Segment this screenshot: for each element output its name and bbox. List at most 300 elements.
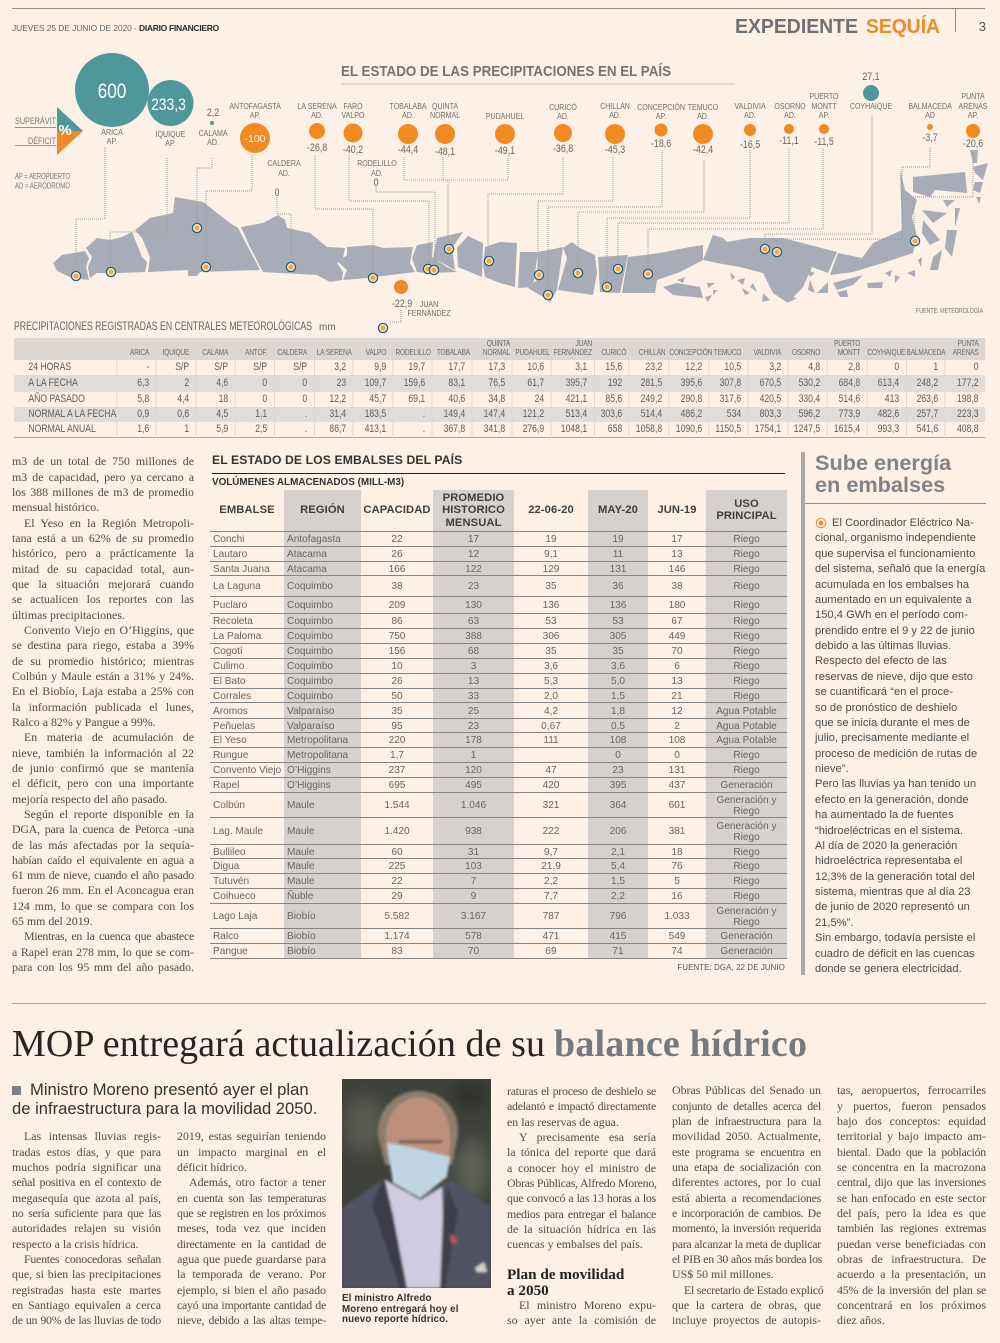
table: precipitaciones por estación: 34,8 [488, 393, 505, 405]
main headline: balance hídrico [554, 1023, 807, 1065]
table: embalses: 108 [610, 735, 626, 746]
table: precipitaciones por estación: 177,2 [957, 377, 979, 389]
table: embalses: 2 [674, 720, 680, 732]
table: embalses: Maule [287, 826, 314, 837]
article: column 1: registradas hasta este martes [12, 1283, 161, 1297]
station names: AP. [968, 110, 978, 120]
table: embalses: 36 [612, 581, 624, 592]
table: embalses: Agua Potable [716, 706, 777, 716]
station names: ARENAS [959, 101, 987, 111]
table: precipitaciones por estación: RODELILLO [395, 348, 431, 357]
station markers [71, 223, 920, 333]
station names: AD. [371, 168, 383, 178]
table: embalses: 1,7 [390, 750, 404, 761]
table: embalses: 17 [468, 534, 479, 545]
table: embalses: 209 [389, 600, 405, 611]
sidebar heading [815, 450, 952, 497]
table: precipitaciones por estación: PUNTA [958, 339, 979, 348]
table: precipitaciones por estación: 5,8 [137, 393, 149, 405]
table: embalses: Riego [733, 600, 760, 611]
article: left column: Ralco a 82% y Pangue a 99%. [12, 715, 156, 729]
table: precipitaciones por estación: BALMACEDA [906, 348, 945, 357]
table title: centrales meteorológicas: PRECIPITACIONES REGISTRADAS EN CENTRALES METEOROLÓGICAS [14, 320, 312, 333]
table: embalses: 11 [613, 549, 623, 560]
sidebar article text: debido a las últimas lluvias. [815, 640, 951, 652]
sidebar article text: Pero las lluvias ya han tenido un [815, 778, 976, 790]
article: left column: de junio confirmó que se mantenía [12, 761, 194, 775]
table: embalses: 10 [391, 661, 403, 672]
main headline: MOP entregará actualización de su [12, 1023, 545, 1065]
table: embalses: 22 [391, 876, 403, 887]
table: precipitaciones por estación: 2,5 [255, 423, 267, 435]
main headline [12, 1023, 807, 1065]
sidebar article text: efecto en la generación, donde [815, 794, 969, 806]
station names: AD. [697, 111, 709, 121]
sidebar article text: nieve”. [815, 763, 849, 775]
table: embalses: 131 [610, 564, 626, 574]
station names: AD. [207, 137, 219, 147]
table: embalses: 12 [468, 549, 479, 560]
station names: FERNÁNDEZ [407, 308, 451, 318]
sidebar article text: cuadro de déficit en las cuencas [815, 948, 975, 960]
icon: bullet [816, 518, 826, 528]
photo caption: El ministro Alfredo [342, 1293, 432, 1304]
article: left column: el déficit, pero con una importante [12, 776, 194, 790]
table: precipitaciones por estación: 4,4 [177, 393, 189, 405]
station names: AD. [402, 110, 414, 120]
section title: expediente sequía: SEQUÍA [866, 15, 940, 38]
table: embalses: 1,8 [611, 706, 625, 716]
table: embalses: 7,7 [544, 891, 558, 902]
table: embalses: Maule [287, 861, 314, 872]
station names: VALPO [342, 110, 364, 120]
article: left column: que la situación mejorará cuando [12, 577, 194, 591]
sidebar article text: sistema, mientras que al día 23 [815, 886, 970, 898]
table: precipitaciones por estación: 85,6 [605, 393, 622, 405]
table: embalses: 17 [671, 534, 683, 545]
table: embalses: 1.174 [384, 931, 410, 942]
table: precipitaciones por estación: JUAN [576, 339, 592, 348]
station names: OSORNO [774, 101, 806, 111]
article: column 3 end: so ayer ante la comisión de [507, 1313, 656, 1327]
station values: -22,9 [392, 298, 413, 310]
table: embalses: 19 [612, 534, 624, 545]
table: embalses: HISTORICO [442, 504, 505, 516]
table: embalses: 53 [545, 616, 557, 627]
station values: -44,4 [398, 144, 419, 156]
table: embalses: Metropolitana [287, 750, 348, 761]
article: left column: la información publicada el lunes, [12, 700, 194, 714]
table: precipitaciones por estación: MONTT [838, 348, 860, 357]
table: embalses: 23 [468, 720, 479, 732]
article: left column: En materia de acumulación de [24, 730, 194, 744]
table: embalses: 3,6 [611, 661, 625, 672]
sidebar article text: hidroeléctrica representaba el [815, 855, 962, 867]
table: precipitaciones por estación: 159,6 [404, 377, 425, 389]
article: column 4: para alcanzar la meta de duplicar [672, 1237, 821, 1251]
table: precipitaciones por estación: 773,9 [839, 408, 860, 420]
photo caption: Moreno entregará hoy el [342, 1304, 459, 1315]
table: embalses: 222 [543, 826, 559, 837]
table: embalses: Maule [287, 846, 314, 858]
table: precipitaciones por estación: 367,8 [444, 423, 465, 435]
table: embalses: Lago Laja [213, 911, 257, 922]
table: precipitaciones por estación: 198,8 [957, 393, 979, 405]
table: embalses: PRINCIPAL [716, 510, 777, 522]
table: embalses: 415 [610, 931, 626, 942]
table: embalses: Agua Potable [716, 720, 777, 732]
table: precipitaciones por estación: 17,3 [488, 361, 505, 373]
table: embalses: 796 [610, 911, 626, 922]
table: embalses: 225 [389, 861, 405, 872]
table: embalses: 19 [545, 534, 557, 545]
table: embalses: 21 [671, 690, 683, 702]
table: embalses: 13 [468, 676, 479, 687]
table: precipitaciones por estación: 23,2 [645, 361, 662, 373]
sidebar article text: cional, organismo independiente [815, 532, 976, 544]
table: precipitaciones por estación: 307,8 [720, 377, 741, 389]
article: column 4: US$ 50 mil millones. [672, 1267, 774, 1281]
deck: ministro moreno: Ministro Moreno presentó ayer el plan [30, 1080, 309, 1099]
table: embalses: 76 [671, 861, 683, 872]
deficit bubbles: -100 [244, 133, 266, 145]
table: precipitaciones por estación: 290,8 [681, 393, 702, 405]
table: precipitaciones por estación: QUINTA [487, 339, 510, 348]
table: precipitaciones por estación: 3,1 [575, 361, 587, 373]
table: embalses: Riego [733, 876, 760, 887]
station values: -16,5 [740, 139, 761, 151]
sidebar article text: del sistema, señaló que la energía [815, 563, 985, 575]
article: left column: Mientras, en la cuenca que abastece [24, 929, 194, 943]
table: embalses: 29 [391, 891, 403, 902]
table: embalses: Atacama [287, 549, 327, 560]
article: left column: habían caído el equivalente en agua a [12, 853, 194, 867]
table: embalses: CAPACIDAD [363, 504, 431, 516]
table: precipitaciones por estación: 3,2 [769, 361, 781, 373]
table: embalses: Ralco [213, 931, 239, 942]
table: precipitaciones por estación: 276,9 [523, 423, 544, 435]
table: embalses: 31 [468, 846, 479, 858]
article: left column: los 388 millones de m3 de promedio [12, 485, 194, 499]
table: embalses: 70 [671, 646, 683, 657]
surplus bubbles: 233,3 [151, 96, 186, 114]
table: embalses: 35 [391, 706, 403, 716]
table: embalses: Generación y [716, 906, 777, 916]
table: embalses: 166 [389, 564, 405, 574]
station names: AP. [250, 110, 260, 120]
table: embalses: 388 [465, 631, 482, 642]
article: column 5: se concentra en la macrozona [837, 1160, 986, 1174]
table: precipitaciones por estación: 5,9 [216, 423, 228, 435]
article: column 2: agua que puede guardarse para [177, 1252, 326, 1266]
table: embalses: 12 [671, 706, 683, 716]
table: embalses: 9,1 [544, 549, 558, 560]
table: embalses: REGIÓN [300, 504, 345, 516]
article: column 5 [837, 1083, 986, 1327]
table: embalses: 69 [545, 946, 557, 957]
table: precipitaciones por estación: 4,8 [808, 361, 820, 373]
table: precipitaciones por estación: 257,7 [917, 408, 938, 420]
table: embalses: Lag. Maule [213, 826, 263, 837]
table: precipitaciones por estación: 658 [608, 423, 622, 435]
article: left column: m3 de un total de 750 millones de [12, 454, 194, 468]
station names: JUAN [420, 299, 439, 309]
sidebar article text: prendido entre el 9 y 22 de junio [815, 625, 975, 637]
article: left column: tana está a un 62% de su promedio [12, 531, 194, 545]
dotted leader lines [76, 115, 973, 322]
table: precipitaciones por estación: 303,6 [601, 408, 622, 420]
legend: superávit / déficit: AP = AEROPUERTO [15, 172, 70, 181]
sidebar article text: “hidroeléctricas en el sistema. [815, 824, 963, 836]
table: embalses: Ñuble [287, 891, 313, 902]
table: precipitaciones por estación: VALPO [366, 348, 386, 357]
page number: 3 [979, 19, 986, 34]
table: embalses: 3 [471, 661, 476, 672]
table: embalses: Valparaíso [287, 720, 335, 732]
article: column 5: bajo dos conceptos: equidad [837, 1114, 986, 1128]
table: embalses: Riego [733, 861, 760, 872]
table: embalses: Bullileo [213, 846, 246, 858]
sidebar accent bar [801, 452, 805, 975]
table: embalses: 108 [669, 735, 685, 746]
legend: superávit / déficit: DÉFICIT [28, 136, 56, 147]
subheading: plan de movilidad [507, 1266, 624, 1298]
article: left column: Convento Viejo en O’Higgins, que [24, 623, 194, 637]
table: precipitaciones por estación: ARENAS [953, 348, 979, 357]
table: embalses: Culimo [213, 661, 244, 672]
table: embalses: Rungue [213, 750, 248, 761]
table: precipitaciones por estación: 18 [219, 393, 228, 405]
table: precipitaciones por estación: 0 [894, 361, 899, 373]
table: precipitaciones por estación: 263,6 [917, 393, 938, 405]
table: precipitaciones por estación: 12,2 [685, 361, 702, 373]
sidebar article text: 150,4 GWh en el período com- [815, 609, 968, 621]
table: embalses: 70 [468, 946, 479, 957]
table: precipitaciones por estación: 0,6 [177, 408, 189, 420]
article: column 1: tradas estos días, y que para [12, 1145, 161, 1159]
table: precipitaciones por estación: 6,3 [137, 377, 149, 389]
article: column 5: y puertos, fueron pensados [837, 1099, 986, 1113]
article: column 5: 45% de la inversión del plan se [837, 1283, 986, 1297]
table: precipitaciones por estación: TOBALABA [437, 348, 470, 357]
table: embalses: Biobío [287, 931, 316, 942]
table: precipitaciones por estación: 2 [184, 377, 189, 389]
station names: LA SERENA [297, 101, 337, 111]
article: column 2: 2019, estas seguirían teniendo [177, 1129, 326, 1143]
legend: superávit / déficit [15, 107, 83, 190]
table: embalses: 2,1 [611, 846, 625, 858]
table: embalses: 13 [671, 676, 683, 687]
table: precipitaciones por estación: 183,5 [365, 408, 386, 420]
table: precipitaciones por estación: 192 [608, 377, 622, 389]
table: embalses: Corrales [213, 690, 251, 702]
table: precipitaciones por estación: 534 [727, 408, 741, 420]
article: column 3 end: El ministro Moreno expu- [519, 1298, 656, 1312]
table: precipitaciones por estación: NORMAL [483, 348, 510, 357]
article: column 3: raturas el proceso de deshielo se [507, 1084, 656, 1098]
table: embalses: Generación [720, 931, 773, 942]
table: embalses: La Paloma [213, 631, 261, 642]
article: left column: 61 mm de nieve, cuando el año pasado [12, 868, 194, 882]
table: embalses: 26 [391, 549, 403, 560]
table: precipitaciones por estación: 413 [885, 393, 899, 405]
table: embalses: 0 [674, 750, 680, 761]
station names: AD. [311, 110, 323, 120]
article: column 3: Y precisamente esa sería [519, 1130, 656, 1144]
table: embalses: 35 [612, 646, 624, 657]
article: column 2: cayó una importante cantidad de [177, 1298, 326, 1312]
station names: ARICA [101, 127, 124, 137]
table: precipitaciones por estación: S/P [175, 361, 189, 373]
article: column 1: señal positiva en el contexto de [12, 1175, 161, 1189]
article: column 1: Fuentes conocedoras señalan [24, 1252, 161, 1266]
table: precipitaciones por estación: 23 [337, 377, 346, 389]
table: embalses: 180 [669, 600, 685, 611]
deck: ministro moreno [12, 1080, 317, 1118]
section rule [12, 1003, 986, 1004]
station values: -36,8 [553, 143, 574, 155]
subheading: plan de movilidad: a 2050 [507, 1282, 549, 1298]
table: precipitaciones por estación: 803,3 [760, 408, 781, 420]
table: embalses [210, 490, 787, 959]
table: embalses: Antofagasta [287, 534, 341, 545]
article: column 5: del país, pero la idea es que [837, 1206, 986, 1220]
table: embalses: Conchi [213, 534, 244, 545]
station names: BALMACEDA [908, 101, 952, 111]
table: embalses: 22-06-20 [528, 504, 574, 516]
table: embalses: MENSUAL [445, 516, 502, 528]
table: embalses: 695 [389, 780, 405, 791]
precipitation map infographic [14, 53, 988, 334]
station names: AD. [278, 168, 290, 178]
article: column 4: movilidad 2050. Actualmente, [672, 1129, 821, 1143]
table: embalses: Riego [733, 916, 760, 928]
source: DGA: FUENTE: DGA, 22 DE JUNIO [677, 963, 785, 972]
station values: 0 [374, 177, 379, 189]
sidebar article text: El Coordinador Eléctrico Na- [832, 517, 974, 529]
table: embalses: 68 [468, 646, 479, 657]
table: embalses: 305 [610, 631, 626, 642]
table: embalses: 63 [468, 616, 479, 627]
table: embalses: O’Higgins [287, 780, 331, 791]
table: precipitaciones por estación: NORMAL ANUAL [28, 423, 96, 435]
sidebar rule [805, 503, 986, 504]
table: embalses: PROMEDIO [443, 492, 504, 504]
station names: AP. [107, 136, 117, 146]
table: embalses: 364 [610, 800, 626, 811]
table: precipitaciones por estación: 15,6 [605, 361, 622, 373]
article: column 2: la temporada de verano. Por [177, 1267, 326, 1281]
article: column 5: puedan verse beneficiadas con [837, 1237, 986, 1251]
subheading: volúmenes: VOLÚMENES ALMACENADOS (MILL-M3) [212, 477, 404, 488]
sidebar article text: Sin embargo, todavía persiste el [815, 932, 975, 944]
heading: embalses table: EL ESTADO DE LOS EMBALSES DEL PAÍS [212, 453, 462, 467]
station names: QUINTA [432, 101, 459, 111]
table: precipitaciones por estación: 330,4 [799, 393, 820, 405]
table: precipitaciones por estación: 514,4 [641, 408, 662, 420]
heading: precipitaciones: EL ESTADO DE LAS PRECIPITACIONES EN EL PAÍS [341, 63, 671, 80]
table: precipitaciones por estación: 248,2 [917, 377, 938, 389]
legend: superávit / déficit: % [58, 122, 72, 139]
table: embalses: Santa Juana [213, 564, 270, 574]
table: precipitaciones por estación: 993,3 [878, 423, 899, 435]
article: column 1: muchos podría significar una [12, 1160, 161, 1174]
table: embalses: 5,0 [611, 676, 625, 687]
table: embalses: Aromos [213, 706, 248, 716]
table: embalses: 47 [545, 765, 557, 776]
table: precipitaciones por estación: 12,2 [329, 393, 346, 405]
sidebar article text: ha aumentado la de fuentes [815, 809, 954, 821]
table: embalses: 1,5 [611, 690, 625, 702]
table: precipitaciones por estación: 24 [535, 393, 544, 405]
article: column 2: meses, toda vez que inciden [177, 1221, 326, 1235]
sidebar article text: so de pronóstico de deshielo [815, 702, 957, 714]
table: precipitaciones por estación: . [305, 423, 307, 435]
table: embalses: Atacama [287, 564, 327, 574]
article: column 4: e incorporación de cambios. De [672, 1206, 821, 1220]
article: column 2: un impacto marginal en el [177, 1145, 326, 1159]
table: precipitaciones por estación: 413,1 [365, 423, 386, 435]
article: left column: En el Biobío, Laja estaba a 25% con [12, 684, 194, 698]
table: embalses: 1.420 [384, 826, 410, 837]
table: embalses: 136 [543, 600, 559, 611]
table: embalses: 103 [465, 861, 482, 872]
article: column 5: también las regiones extremas [837, 1221, 986, 1235]
table: precipitaciones por estación: S/P [214, 361, 228, 373]
table: embalses: 5 [674, 876, 680, 887]
table: embalses: Metropolitana [287, 735, 348, 746]
table: precipitaciones por estación: 69,1 [408, 393, 425, 405]
table: embalses: Riego [733, 806, 760, 816]
table: embalses: 86 [391, 616, 403, 627]
station values: 0 [275, 187, 280, 199]
table: precipitaciones por estación: 421,1 [566, 393, 587, 405]
table: precipitaciones por estación: 613,4 [878, 377, 899, 389]
table: embalses: O’Higgins [287, 765, 331, 776]
table: embalses: 1.046 [461, 800, 486, 811]
article: column 1 [12, 1129, 161, 1327]
table: precipitaciones por estación: 4,6 [216, 377, 228, 389]
table: embalses: La Laguna [213, 581, 261, 592]
article: column 1: no sería suficiente para que las [12, 1206, 161, 1220]
sidebar article text: que se inicia durante el mes de [815, 717, 970, 729]
article: left column: Colbún y Maule están a 31% y 24%. [12, 669, 194, 683]
article: column 4: plan de infraestructura para la [672, 1114, 821, 1128]
table: embalses: Riego [733, 549, 760, 560]
table: embalses: 3.167 [461, 911, 486, 922]
sidebar article text: de junio de 2020 representó un [815, 901, 970, 913]
article: column 3: de la situación hídrica en las [507, 1222, 656, 1236]
article: column 4: que la cartera de obras, que [672, 1298, 821, 1312]
table: embalses: 5.582 [384, 911, 410, 922]
sidebar article text: que supervisa el funcionamiento [815, 548, 975, 560]
article: column 5: acuerdo a la presentación, un [837, 1267, 986, 1281]
table: embalses: Riego [733, 832, 760, 842]
table: embalses: Coihueco [213, 891, 256, 902]
table: embalses: El Bato [213, 676, 246, 687]
table: precipitaciones por estación: 684,8 [839, 377, 860, 389]
table: embalses: Maule [287, 800, 314, 811]
table: embalses: Riego [733, 646, 760, 657]
station values: -20,6 [963, 138, 984, 150]
sidebar article text: acumulada en los embalses ha [815, 578, 969, 590]
table: precipitaciones por estación: 514,6 [839, 393, 860, 405]
table: embalses: 381 [669, 826, 685, 837]
table: embalses: 35 [545, 646, 557, 657]
sidebar article text: julio, precisamente mediante el [815, 732, 969, 744]
station names [101, 91, 987, 318]
table: embalses: Valparaíso [287, 706, 335, 716]
